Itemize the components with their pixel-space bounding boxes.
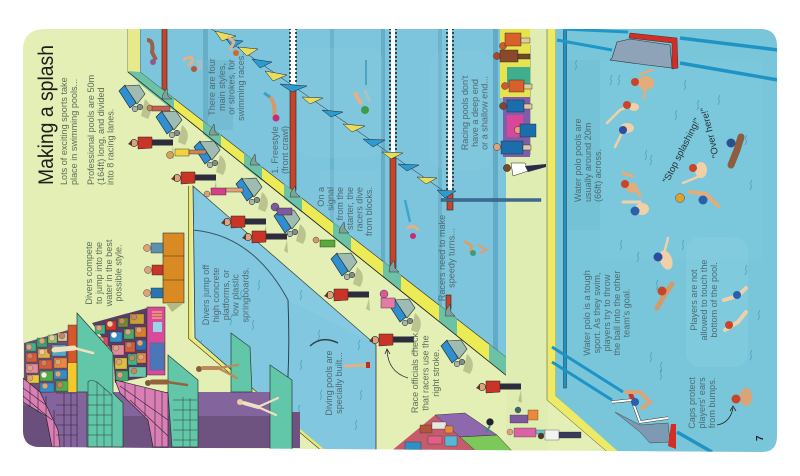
text: pool bottom: bottom of the pool. — [709, 262, 719, 338]
panel: water polo pool — [556, 28, 780, 456]
text: starter signal: signal — [326, 187, 336, 211]
player 5 — [623, 202, 649, 216]
text: caps: players' ears — [697, 377, 707, 429]
ball — [676, 194, 684, 202]
text: diving pools: specially built... — [334, 352, 344, 414]
text: deep end: have a deep end — [470, 79, 480, 147]
swimmer 7 — [464, 241, 486, 256]
starter official — [503, 163, 546, 176]
text: freestyle label: (front crawl) — [280, 126, 290, 174]
text: caps: Caps protect — [687, 377, 697, 429]
bleachers — [494, 28, 536, 157]
text: race officials: Race officials check — [410, 332, 420, 413]
title: Making a splash — [35, 45, 58, 185]
lane ropes — [162, 28, 453, 309]
player 8 — [726, 137, 741, 165]
race officials — [128, 137, 522, 403]
swimmer 1 — [147, 40, 156, 65]
crowd stand — [24, 308, 147, 393]
diving platforms base — [23, 392, 300, 448]
top water polo goal — [557, 29, 778, 80]
text: platforms: Divers jump off — [201, 264, 211, 325]
text: divers compete: Divers compete — [84, 241, 94, 305]
text: polo pool size: Water polo pools are — [573, 118, 583, 202]
text: pool bottom: Players are not — [689, 269, 699, 331]
racing swimmers — [147, 37, 486, 256]
text: speedy turns: speedy turns... — [446, 228, 456, 288]
text: pool length: Professional pools are 50m — [86, 75, 96, 185]
text: divers compete: to jump into the — [94, 242, 104, 304]
text: pool length: (164ft) long, and divided — [96, 87, 106, 185]
text: starter signal: On a — [316, 186, 326, 207]
text: caps: from bumps. — [707, 378, 717, 428]
spectators — [26, 314, 146, 392]
scoreboard — [147, 307, 165, 375]
player 1 — [631, 70, 654, 98]
player 3 — [615, 123, 634, 147]
spectators — [494, 33, 536, 154]
text: tough sport: sport. As they swim, — [592, 273, 602, 353]
text: pool length: into 8 racing lanes. — [105, 109, 115, 185]
player 11 — [724, 288, 746, 300]
bottom water polo goal — [552, 347, 712, 452]
people on lower deck — [486, 407, 581, 440]
player 12 — [725, 312, 746, 330]
player 9 — [654, 238, 675, 271]
text: four styles: swimming races. — [236, 53, 246, 121]
swimmer 3 — [228, 37, 239, 56]
text: divers compete: water in the best — [104, 239, 114, 307]
text: polo pool size: (66ft) across. — [593, 149, 603, 202]
text: four styles: There are four — [207, 58, 217, 116]
diving tower 3 — [231, 333, 252, 392]
text: polo pool size: usually around 20m — [583, 123, 593, 202]
swimmer 5 — [355, 60, 370, 114]
judges — [144, 243, 163, 298]
text: diving pools: Diving pools are — [324, 350, 334, 416]
player 10 — [657, 284, 672, 308]
text: platforms: platforms, or — [221, 270, 231, 320]
speech: over here: "Over here!" — [699, 106, 722, 159]
panel: diving pool water — [188, 186, 376, 452]
text: deep end: Racing pools don't — [460, 75, 470, 150]
text: four styles: or strokes, for — [227, 59, 237, 115]
player 13 — [626, 392, 650, 408]
diving tower 4 — [270, 365, 292, 450]
player 2 — [607, 101, 639, 123]
diver legs in pool — [344, 362, 370, 368]
text: pool bottom: allowed to touch the — [699, 260, 709, 340]
text: platforms: low plastic — [230, 274, 240, 316]
text: starter signal: racers dive — [354, 187, 364, 231]
starting blocks on pool edge — [162, 88, 455, 316]
text: deep end: or a shallow end... — [480, 76, 490, 150]
bottom deck crowd — [390, 413, 513, 452]
text: freestyle label: 1. Freestyle — [270, 126, 280, 174]
text: tough sport: the ball into the other — [612, 271, 622, 355]
text: tough sport: Water polo is a tough — [582, 270, 592, 356]
diving judges table — [144, 233, 184, 312]
swimmer 2 — [183, 57, 202, 72]
page number: 7 — [755, 435, 766, 441]
divers on platforms — [47, 348, 278, 415]
pole — [441, 198, 541, 202]
arrow: race officials — [385, 349, 408, 378]
water polo players — [607, 70, 752, 408]
text: divers compete: possible style. — [114, 244, 124, 302]
player 4 — [621, 173, 640, 196]
swimmer freestyle — [264, 93, 280, 122]
competitors on deck — [147, 105, 395, 308]
text: speedy turns: Racers need to make — [437, 215, 447, 301]
backstroke flags — [210, 28, 456, 198]
text: four styles: main styles, — [217, 63, 227, 111]
text: tough sport: team's goal. — [622, 289, 632, 337]
player 14 — [732, 388, 752, 406]
pink stair lattices — [23, 378, 168, 447]
diving tower 2 — [168, 355, 198, 447]
swimmer 6 — [405, 200, 418, 239]
text: race officials: right stroke. — [431, 349, 441, 397]
text: starter signal: from the — [335, 187, 345, 220]
player 7 — [690, 192, 718, 206]
text: intro: place in swimming pools... — [69, 79, 79, 185]
speech: stop splashing: "Stop splashing!" — [661, 116, 703, 185]
text: race officials: that racers use the — [420, 335, 430, 411]
player 6 — [683, 162, 707, 183]
text: tough sport: players try to throw — [602, 274, 612, 351]
arrow: caps — [717, 406, 736, 425]
panel: right deck — [506, 28, 625, 456]
text: starter signal: from blocks. — [364, 187, 374, 236]
text: starter signal: starter, the — [345, 187, 355, 230]
diving tower 1 — [77, 313, 123, 447]
text: platforms: springboards. — [240, 267, 250, 323]
text: platforms: high concrete — [211, 268, 221, 322]
deck edge strip — [128, 28, 507, 376]
text: intro: Lots of exciting sports take — [59, 77, 69, 185]
panel: racing pool water — [140, 28, 506, 358]
timing blocks — [119, 85, 473, 374]
